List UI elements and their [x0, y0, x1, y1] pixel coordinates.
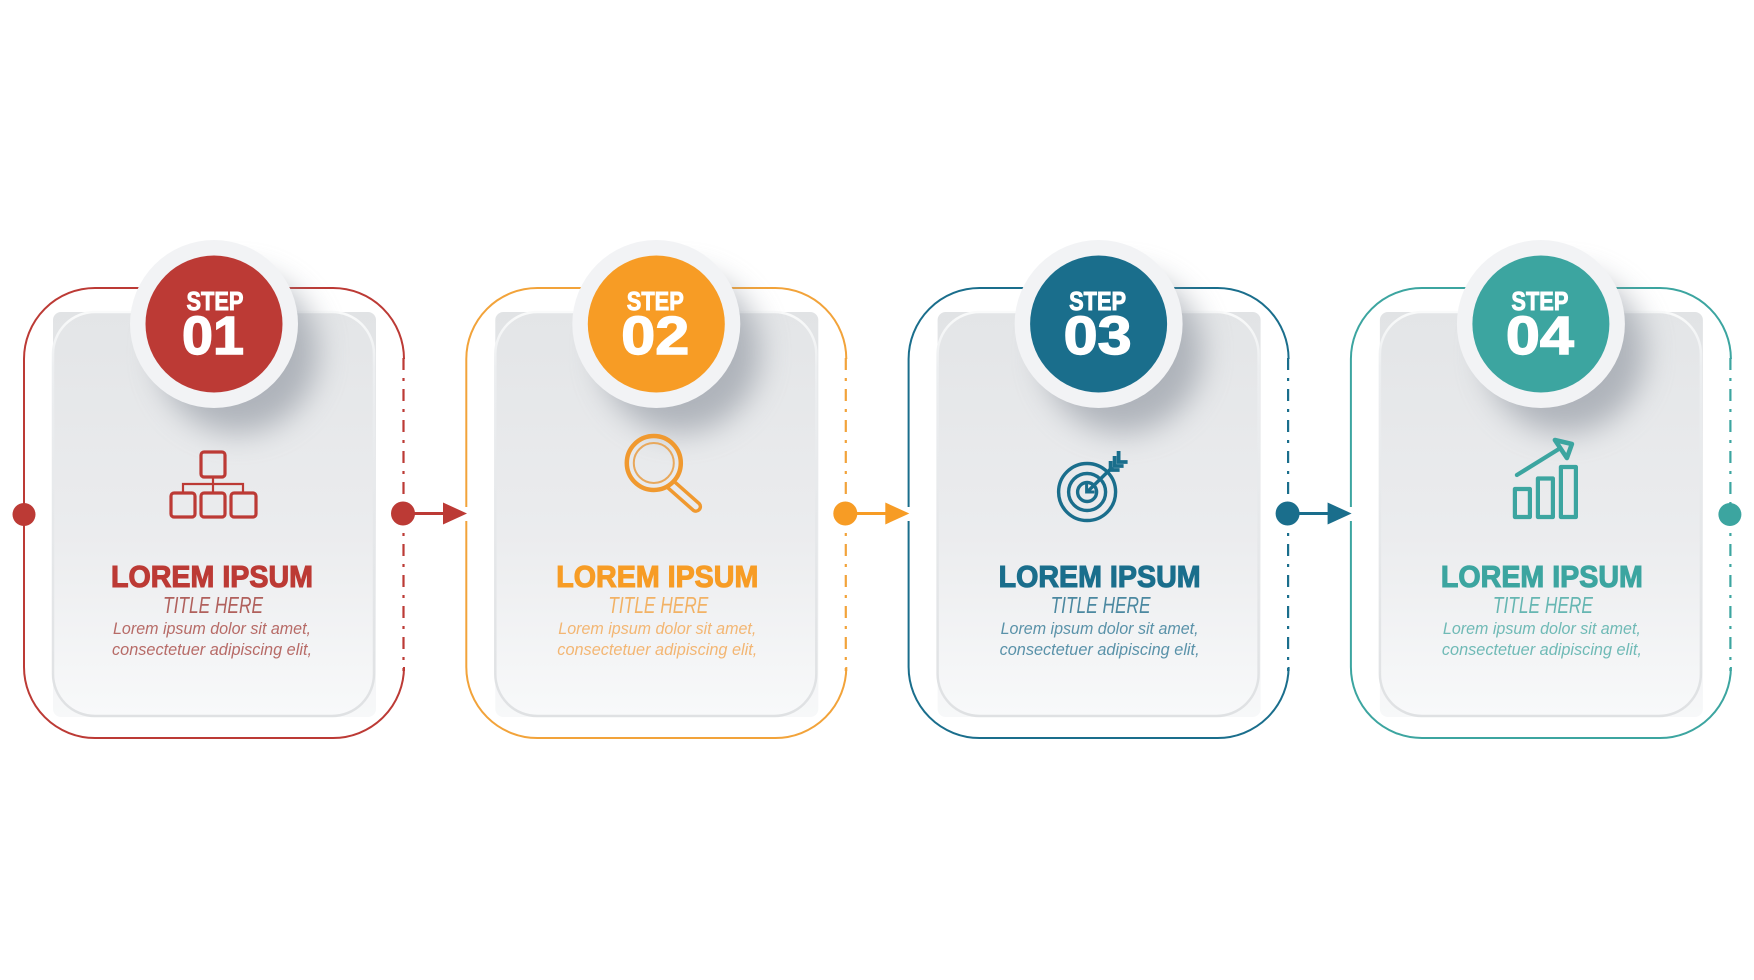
step 04 — [1351, 240, 1741, 738]
badge: step 01: 01 — [182, 306, 244, 366]
badge: step 02: 02 — [621, 306, 689, 366]
badge: step 04: 04 — [1506, 306, 1574, 366]
text: step 01: consectetuer adipiscing elit, — [112, 640, 312, 659]
text: step 01 — [111, 559, 313, 659]
text: step 04: LOREM IPSUM — [1441, 559, 1643, 594]
text: step 01: TITLE HERE — [163, 592, 263, 618]
text: step 02: Lorem ipsum dolor sit amet, — [558, 619, 756, 638]
panel: step 03 card — [938, 312, 1261, 717]
icon: target — [1059, 451, 1128, 520]
text: step 01: LOREM IPSUM — [111, 559, 313, 594]
badge: step 02 — [572, 240, 760, 433]
text: step 03 — [999, 559, 1201, 659]
text: step 04: consectetuer adipiscing elit, — [1442, 640, 1642, 659]
dashed right edge — [1287, 358, 1289, 671]
icon: hierarchy — [171, 452, 256, 517]
panel: step 02 card — [495, 312, 818, 717]
arrow: step 02 to 03 — [833, 502, 909, 526]
badge: step 01: STEP — [186, 286, 244, 316]
dashed right edge — [845, 358, 847, 671]
badge: step 03: STEP — [1069, 286, 1126, 316]
text: step 03: LOREM IPSUM — [999, 559, 1201, 594]
outline: step 04 — [1351, 288, 1731, 738]
arrow: step 03 to 04 — [1276, 502, 1352, 526]
left dot — [12, 503, 36, 526]
icon: growth chart — [1515, 440, 1576, 517]
outline: step 02 — [466, 288, 846, 738]
right dot — [1718, 503, 1741, 526]
text: step 03: consectetuer adipiscing elit, — [1000, 640, 1200, 659]
outline: step 03 — [909, 288, 1289, 738]
badge: step 03: 03 — [1064, 306, 1132, 366]
text: step 02: consectetuer adipiscing elit, — [557, 640, 757, 659]
text: step 04 — [1441, 559, 1643, 659]
text: step 02 — [556, 559, 758, 659]
dashed right edge — [1729, 358, 1732, 671]
badge: step 04 — [1457, 240, 1645, 433]
text: step 02: LOREM IPSUM — [556, 559, 758, 594]
text: step 03: TITLE HERE — [1051, 592, 1151, 618]
step 02 — [466, 240, 909, 738]
badge: step 02: STEP — [627, 286, 684, 316]
text: step 04: Lorem ipsum dolor sit amet, — [1443, 619, 1641, 638]
icon: magnifier — [627, 436, 700, 511]
badge: step 01 — [130, 240, 318, 433]
text: step 04: TITLE HERE — [1493, 592, 1593, 618]
outline: step 01 — [24, 288, 404, 738]
text: step 01: Lorem ipsum dolor sit amet, — [113, 619, 311, 638]
step 01 — [12, 240, 467, 738]
badge: step 03 — [1015, 240, 1203, 433]
text: step 02: TITLE HERE — [608, 592, 709, 618]
dashed right edge — [402, 358, 405, 671]
step 03 — [909, 240, 1352, 738]
panel: step 01 card — [53, 312, 376, 717]
badge: step 04: STEP — [1511, 286, 1568, 316]
text: step 03: Lorem ipsum dolor sit amet, — [1001, 619, 1199, 638]
arrow: step 01 to 02 — [391, 502, 467, 526]
panel: step 04 card — [1380, 312, 1703, 717]
